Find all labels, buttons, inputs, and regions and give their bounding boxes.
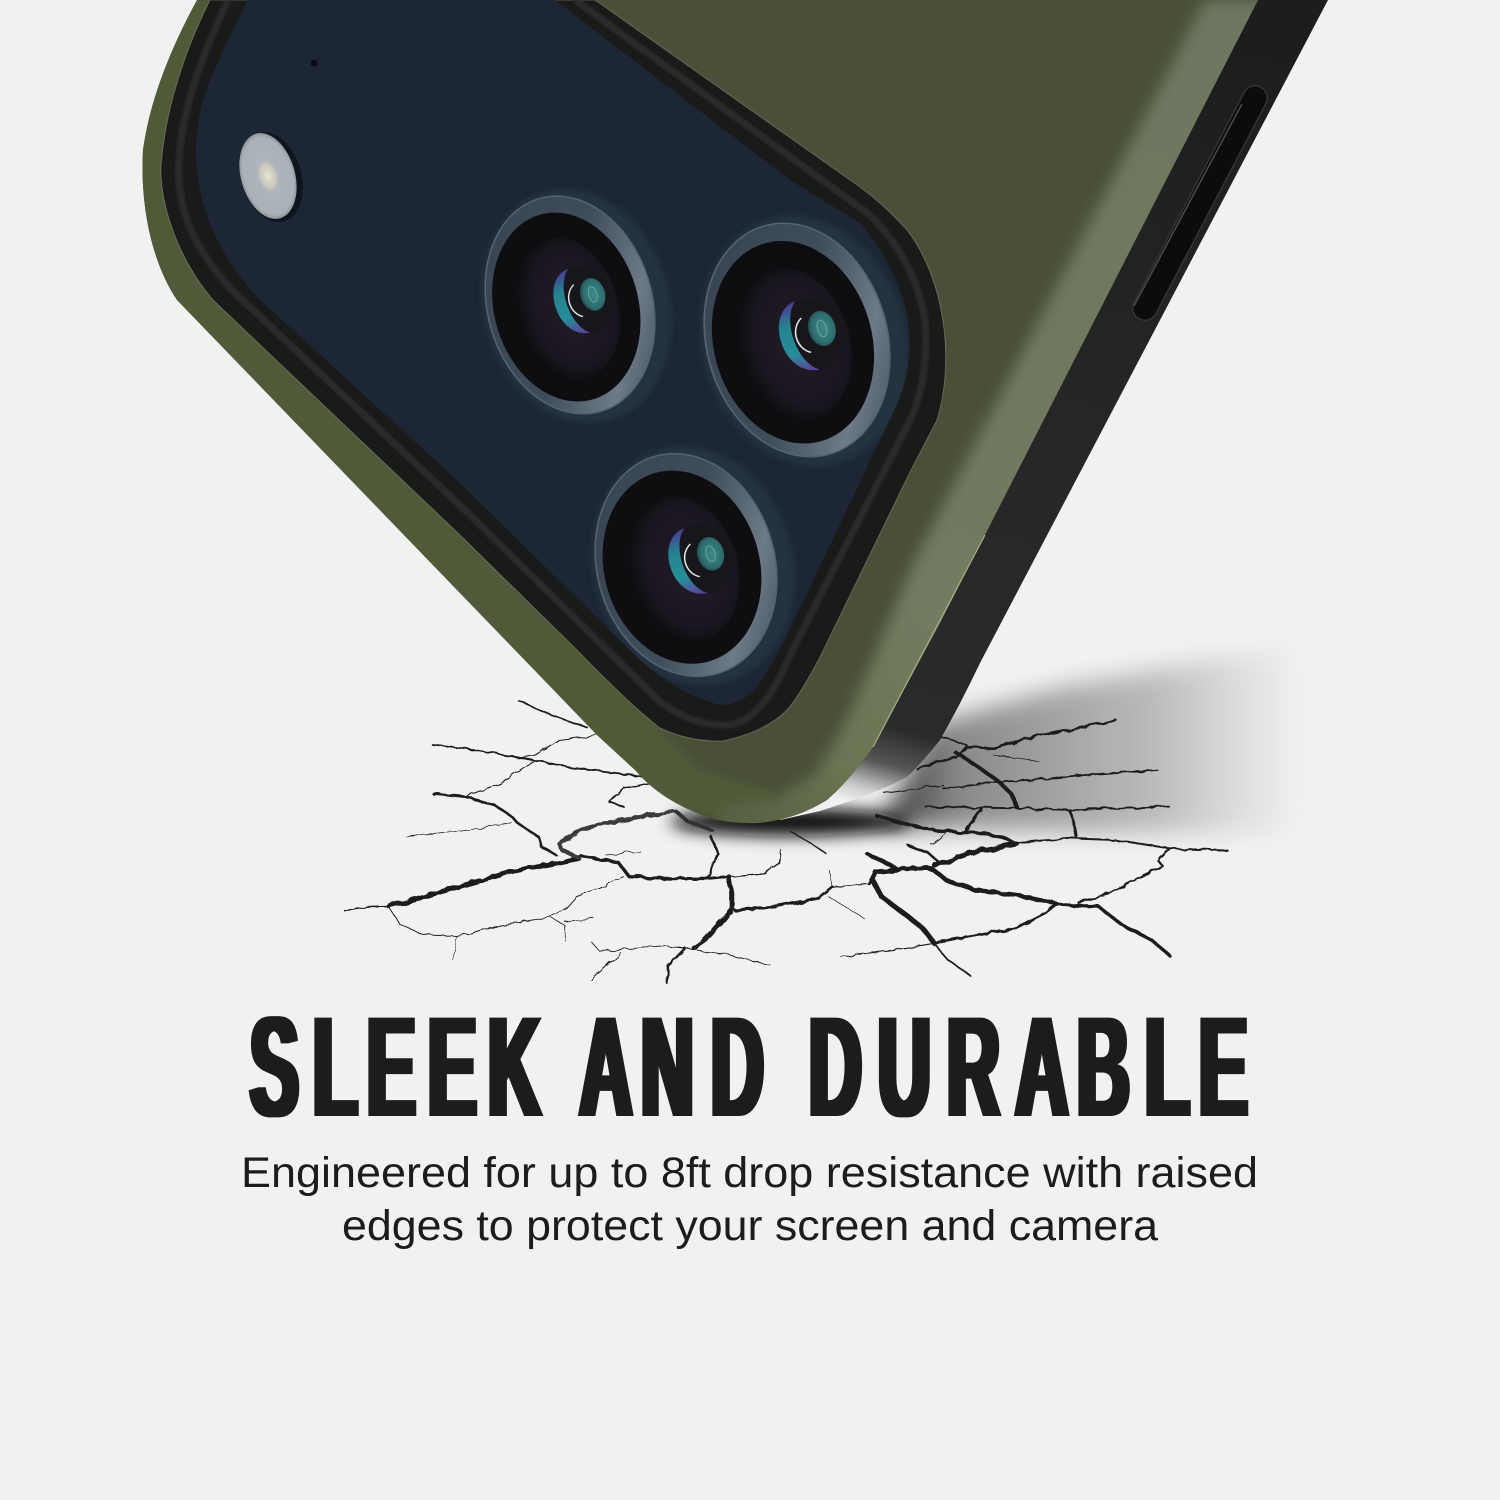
ground cracks <box>345 700 1228 983</box>
flash <box>230 125 313 230</box>
lens 1 <box>483 190 670 422</box>
description text: Engineered for up to 8ft drop resistance with raised <box>241 1149 1258 1197</box>
camera glass panel <box>196 0 937 710</box>
lens 3 <box>592 448 794 684</box>
lens 2 <box>702 217 908 466</box>
description text: edges to protect your screen and camera <box>342 1202 1158 1250</box>
case side wall <box>780 0 1328 820</box>
case olive body <box>130 0 1320 835</box>
description text <box>241 1149 1258 1250</box>
contact shadow under phone <box>670 808 910 836</box>
black bumper <box>161 0 946 741</box>
infographic canvas <box>142 0 1328 1249</box>
phone in case <box>130 0 1328 835</box>
cast shadow of phone <box>880 646 1300 833</box>
side button <box>1134 98 1255 308</box>
rim highlight line <box>873 535 985 747</box>
microphone hole <box>310 60 318 66</box>
heading: SLEEK AND DURABLE <box>250 987 1248 1147</box>
